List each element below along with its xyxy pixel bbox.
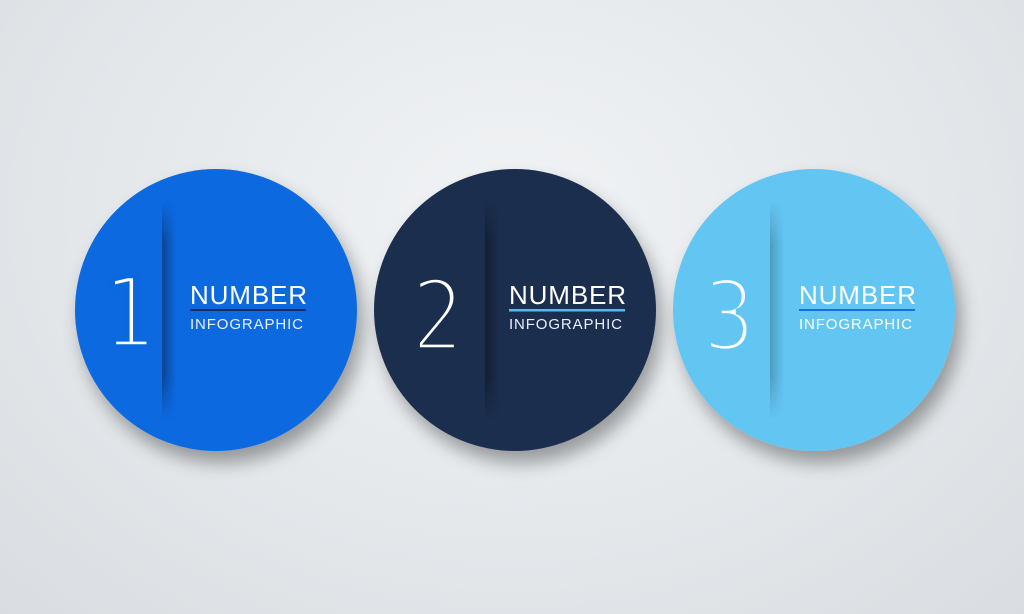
label 2: NUMBER xyxy=(509,280,626,310)
number 2: 2 xyxy=(412,261,464,374)
number 1: 1 xyxy=(104,258,156,371)
label 2 xyxy=(509,280,626,333)
number 3: 3 xyxy=(703,261,755,374)
label 1 xyxy=(190,280,307,333)
label 3: INFOGRAPHIC xyxy=(799,316,912,333)
label 3: NUMBER xyxy=(799,280,916,310)
circle 3 xyxy=(673,169,955,451)
label 2: INFOGRAPHIC xyxy=(509,316,622,333)
label 3 xyxy=(799,280,916,333)
label 1: NUMBER xyxy=(190,280,307,310)
circle 2 xyxy=(374,169,656,451)
label 1: INFOGRAPHIC xyxy=(190,316,303,333)
circle 1 xyxy=(75,169,357,451)
